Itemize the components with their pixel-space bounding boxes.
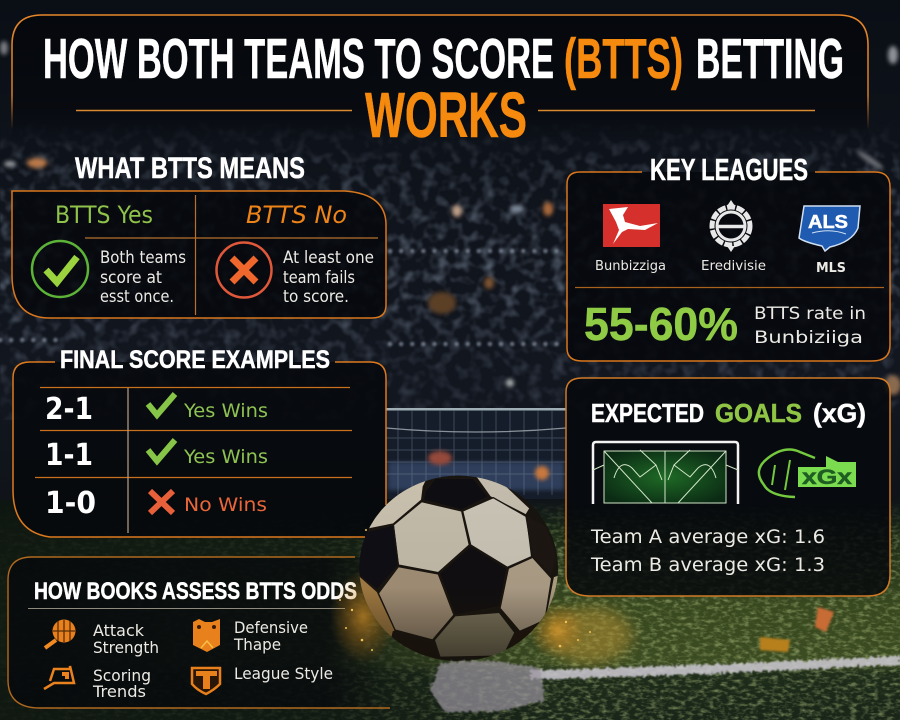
BTTS no column: At least one bbox=[283, 248, 374, 267]
icon: magnifier bbox=[45, 620, 76, 648]
panel: expected goals bbox=[566, 378, 890, 596]
team xG figures: Team B average xG: 1.3 bbox=[590, 554, 825, 576]
row: 1-1 yes wins: 1-1 bbox=[45, 438, 93, 473]
item: defensive thape: Defensive bbox=[234, 618, 308, 637]
heading: expected goals: (xG) bbox=[813, 398, 866, 428]
row: 1-1 yes wins: Yes Wins bbox=[183, 446, 268, 468]
BTTS yes column: score at bbox=[100, 268, 162, 287]
panel: what BTTS means bbox=[12, 152, 386, 318]
item: defensive thape: Thape bbox=[233, 635, 281, 654]
icon: soccer ball bbox=[330, 473, 585, 663]
title line one: (BTTS) bbox=[564, 27, 683, 91]
item: attack strength bbox=[45, 620, 159, 657]
icon: league shield bbox=[192, 668, 220, 694]
heading: expected goals bbox=[591, 398, 866, 428]
title line one: HOW BOTH TEAMS TO SCORE bbox=[43, 27, 554, 91]
logo: Eredivisie: Eredivisie bbox=[701, 258, 766, 274]
item: league style: League Style bbox=[234, 664, 333, 683]
item: scoring trends: Trends bbox=[92, 682, 146, 701]
BTTS yes column: BTTS Yes bbox=[55, 201, 153, 229]
item: league style bbox=[192, 664, 333, 694]
logo: Bunbizziga: Bunbizziga bbox=[595, 258, 666, 274]
heading: what BTTS means: WHAT BTTS MEANS bbox=[75, 152, 305, 185]
white pitch line bbox=[530, 660, 900, 675]
panel: how books assess BTTS odds bbox=[8, 557, 395, 708]
heading: how books assess: HOW BOOKS ASSESS BTTS ODDS bbox=[34, 578, 357, 605]
item: attack strength: Strength bbox=[93, 638, 159, 657]
panel: key leagues bbox=[567, 152, 890, 361]
icon: scoring flag bbox=[44, 666, 74, 689]
item: defensive thape bbox=[193, 618, 308, 654]
row: 1-0 no wins: No Wins bbox=[184, 494, 267, 516]
row: 1-1 yes wins bbox=[45, 438, 268, 473]
stat: BTTS rate: 55-60% bbox=[584, 298, 738, 350]
heading: expected goals: EXPECTED bbox=[591, 398, 704, 428]
heading: key leagues: KEY LEAGUES bbox=[650, 152, 808, 187]
BTTS no column: to score. bbox=[283, 287, 349, 306]
item: scoring trends bbox=[44, 666, 151, 701]
logo: Eredivisie bbox=[701, 200, 766, 274]
grass pitch bbox=[0, 500, 900, 720]
row: 1-0 no wins: 1-0 bbox=[45, 486, 96, 521]
icon: xG cloud badge bbox=[759, 450, 856, 497]
logo: MLS: MLS bbox=[816, 260, 846, 276]
icon: xG cloud badge: xGx bbox=[802, 466, 852, 489]
icon: red cross circle bbox=[216, 242, 272, 298]
row: 2-1 yes wins bbox=[45, 392, 268, 427]
heading: expected goals: GOALS bbox=[715, 398, 802, 428]
item: scoring trends: Scoring bbox=[93, 666, 151, 685]
logo: Bunbizziga bbox=[595, 204, 666, 274]
title panel bbox=[12, 15, 868, 151]
item: attack strength: Attack bbox=[93, 621, 145, 640]
BTTS yes column bbox=[32, 201, 186, 306]
team xG figures: Team A average xG: 1.6 bbox=[590, 526, 825, 548]
row: 2-1 yes wins: Yes Wins bbox=[183, 400, 268, 422]
icon: goal tactics board bbox=[593, 442, 738, 504]
row: 1-0 no wins bbox=[45, 486, 267, 521]
title word works: WORKS bbox=[365, 79, 527, 151]
icon: defensive shield bbox=[193, 619, 220, 652]
orange grass flags bbox=[760, 607, 834, 652]
BTTS no column: BTTS No bbox=[246, 201, 347, 229]
logo: MLS bbox=[799, 206, 860, 276]
stat: BTTS rate: BTTS rate in bbox=[754, 304, 866, 323]
panel: final score examples bbox=[12, 346, 386, 537]
stat: BTTS rate bbox=[584, 298, 866, 350]
BTTS no column bbox=[216, 201, 374, 306]
turf in front of ball bbox=[430, 661, 545, 712]
BTTS yes column: esst once. bbox=[100, 287, 174, 306]
BTTS no column: team fails bbox=[283, 268, 355, 287]
BTTS yes column: Both teams bbox=[100, 248, 186, 267]
logo: MLS: ALS bbox=[808, 212, 848, 232]
golden sparks around ball bbox=[339, 529, 591, 651]
goal net bbox=[385, 408, 566, 499]
row: 2-1 yes wins: 2-1 bbox=[45, 392, 93, 427]
heading: final score examples: FINAL SCORE EXAMPLES bbox=[60, 346, 330, 374]
icon: green check circle bbox=[32, 241, 88, 297]
stat: BTTS rate: Bunbiziiga bbox=[754, 328, 863, 347]
